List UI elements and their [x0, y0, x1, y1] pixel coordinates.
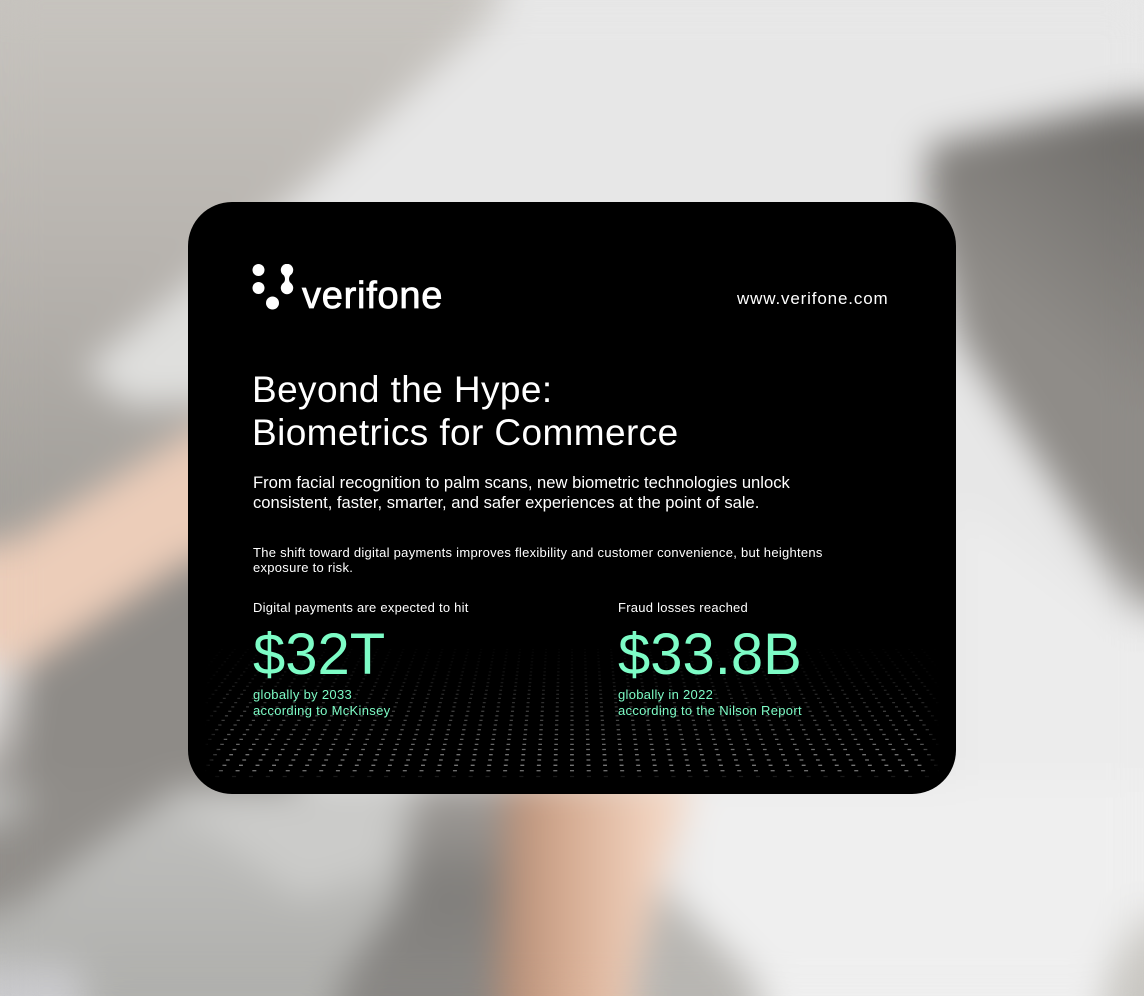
intro text: consistent, faster, smarter, and safer experiences at the point of sale. — [253, 493, 759, 512]
stat source: globally in 2022 — [618, 687, 713, 702]
stat value: $32T — [253, 622, 385, 687]
stat: fraud losses — [618, 600, 802, 718]
dotted perspective floor pattern — [206, 658, 938, 777]
title: Biometrics for Commerce — [252, 412, 679, 453]
website url: www.verifone.com — [737, 289, 889, 308]
intro text: From facial recognition to palm scans, new biometric technologies unlock — [253, 473, 790, 492]
title — [252, 369, 679, 453]
stat value: $33.8B — [618, 622, 802, 687]
stat label: Fraud losses reached — [618, 600, 748, 615]
intro text — [253, 473, 790, 512]
stat source: according to McKinsey — [253, 703, 391, 718]
logo: verifone — [252, 264, 443, 317]
stat source: according to the Nilson Report — [618, 703, 802, 718]
icon: verifone dots — [252, 264, 294, 310]
context text: The shift toward digital payments improves flexibility and customer convenience, but heightens — [253, 545, 823, 560]
stat source — [253, 687, 391, 718]
panel: black card — [188, 202, 956, 794]
context text — [253, 545, 823, 575]
title: Beyond the Hype: — [252, 369, 553, 410]
wordmark: verifone — [302, 275, 443, 317]
stat source — [618, 687, 802, 718]
stat: digital payments — [253, 600, 469, 718]
stat label: Digital payments are expected to hit — [253, 600, 469, 615]
context text: exposure to risk. — [253, 560, 353, 575]
stat source: globally by 2033 — [253, 687, 352, 702]
